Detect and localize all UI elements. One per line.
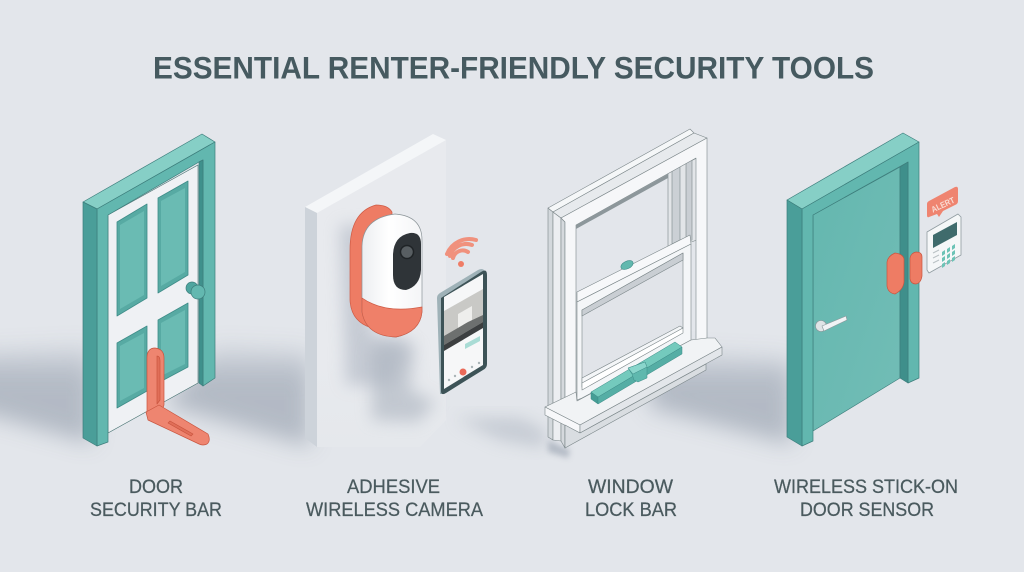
label: window lock bar [585, 477, 677, 521]
label: adhesive wireless camera: WIRELESS CAMERA [306, 500, 483, 521]
camera lens housing [393, 233, 421, 290]
icon: wifi signal [447, 239, 476, 267]
window lower sash [577, 244, 691, 400]
alert bubble [927, 187, 958, 217]
icon: smartphone with camera app [437, 269, 487, 394]
label: window lock bar: LOCK BAR [585, 500, 677, 521]
door frame [83, 134, 215, 446]
icon: window lock bar [591, 342, 682, 404]
door leaf [108, 165, 198, 433]
window sash rail [577, 235, 691, 302]
label: wireless stick-on door sensor: DOOR SENSOR [800, 500, 934, 521]
camera lens [400, 246, 414, 258]
icon: alarm keypad [927, 214, 961, 273]
label: adhesive wireless camera [306, 477, 483, 521]
door panels [117, 181, 188, 408]
icon: door sensor pair [887, 252, 922, 294]
door frame [787, 133, 919, 446]
label: wireless stick-on door sensor [774, 477, 958, 521]
door leaf [813, 167, 900, 431]
icon: sash latch [619, 259, 635, 271]
label: window lock bar: WINDOW [588, 477, 673, 498]
label: adhesive wireless camera: ADHESIVE [347, 477, 440, 498]
title: ESSENTIAL RENTER-FRIENDLY SECURITY TOOLS [153, 50, 874, 86]
label: door security bar [90, 477, 222, 521]
window sill [545, 338, 722, 448]
panel: window lock bar [545, 129, 722, 448]
window frame [548, 129, 707, 448]
panel: door security bar [83, 134, 215, 446]
label: door security bar: DOOR [129, 477, 183, 498]
panel: adhesive wireless camera [305, 134, 487, 447]
icon: door knob [186, 282, 205, 299]
icon: door security bar [146, 348, 209, 445]
panel: wireless stick-on door sensor [787, 133, 961, 446]
label: door security bar: SECURITY BAR [90, 500, 222, 521]
label: wireless stick-on door sensor: WIRELESS STICK-ON [774, 477, 958, 498]
wall [305, 134, 446, 447]
alert bubble: ALERT [929, 195, 957, 215]
icon: door handle [816, 316, 847, 332]
icon: security camera [350, 205, 422, 337]
